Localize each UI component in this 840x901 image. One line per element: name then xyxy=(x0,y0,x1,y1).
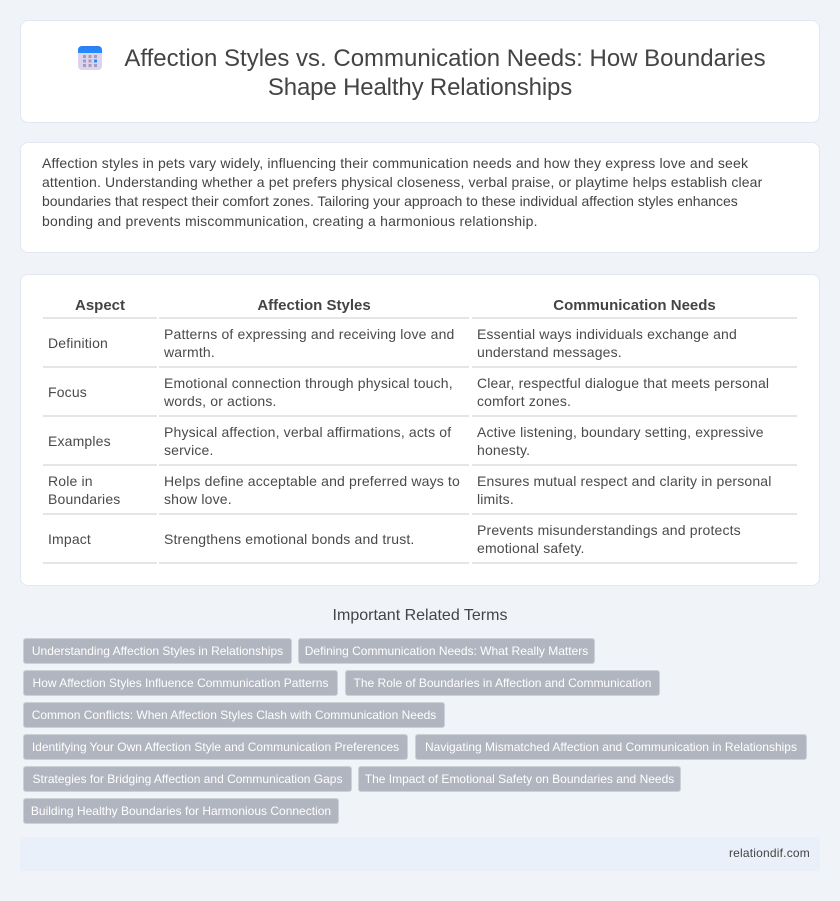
tag: The Role of Boundaries in Affection and Communication xyxy=(354,676,651,690)
panel: header xyxy=(20,20,820,123)
tag xyxy=(298,638,595,664)
tag: Common Conflicts: When Affection Styles Clash with Communication Needs xyxy=(32,708,436,722)
table: comfort zones. xyxy=(477,393,571,409)
footer xyxy=(20,837,820,871)
table: show love. xyxy=(164,491,232,507)
related terms tags xyxy=(23,638,807,824)
table: Essential ways individuals exchange and xyxy=(477,326,737,342)
tag: Defining Communication Needs: What Really Matters xyxy=(305,644,588,658)
related terms heading: Important Related Terms xyxy=(333,607,507,624)
table: honesty. xyxy=(477,442,530,458)
tag xyxy=(23,734,408,760)
table: Helps define acceptable and preferred ways to xyxy=(164,473,460,489)
title: Affection Styles vs. Communication Needs: How Boundaries xyxy=(124,45,766,72)
table: Strengthens emotional bonds and trust. xyxy=(164,531,414,547)
row: impact: Impact xyxy=(48,531,91,547)
tag xyxy=(358,766,681,792)
row: examples: Examples xyxy=(48,433,111,449)
tag xyxy=(23,638,292,664)
tag xyxy=(345,670,660,696)
table: warmth. xyxy=(164,344,215,360)
tag: Navigating Mismatched Affection and Communication in Relationships xyxy=(425,740,797,754)
header: aspect: Aspect xyxy=(75,297,125,314)
table: emotional safety. xyxy=(477,540,585,556)
tag: Strategies for Bridging Affection and Communication Gaps xyxy=(33,772,342,786)
tag: Building Healthy Boundaries for Harmonious Connection xyxy=(31,804,331,818)
intro text: Affection styles in pets vary widely, influencing their communication needs and how they express love and seek xyxy=(42,155,748,171)
table: words, or actions. xyxy=(164,393,277,409)
table: Patterns of expressing and receiving love and xyxy=(164,326,454,342)
header: communication needs: Communication Needs xyxy=(553,297,716,314)
table: Physical affection, verbal affirmations, acts of xyxy=(164,424,451,440)
footer source text: relationdif.com xyxy=(729,846,810,860)
table: understand messages. xyxy=(477,344,622,360)
intro text: boundaries that respect their comfort zones. Tailoring your approach to these individual affection styles enhances xyxy=(42,193,738,209)
table: service. xyxy=(164,442,214,458)
panel: intro paragraph xyxy=(20,142,820,253)
table xyxy=(43,297,797,564)
tag xyxy=(23,702,445,728)
table: Emotional connection through physical touch, xyxy=(164,375,453,391)
tag xyxy=(415,734,807,760)
row: focus: Focus xyxy=(48,384,87,400)
tag xyxy=(23,798,339,824)
header: affection styles: Affection Styles xyxy=(257,297,371,314)
tag: Understanding Affection Styles in Relationships xyxy=(32,644,283,658)
intro text: attention. Understanding whether a pet prefers physical closeness, verbal praise, or playtime helps establish clear xyxy=(42,174,762,190)
table: limits. xyxy=(477,491,514,507)
table: Prevents misunderstandings and protects xyxy=(477,522,741,538)
row: definition: Definition xyxy=(48,335,108,351)
tag xyxy=(23,670,338,696)
intro text xyxy=(42,155,762,229)
tag xyxy=(23,766,352,792)
title xyxy=(124,45,766,101)
row: role in boundaries: Boundaries xyxy=(48,491,120,507)
table: Clear, respectful dialogue that meets personal xyxy=(477,375,769,391)
table: Active listening, boundary setting, expressive xyxy=(477,424,764,440)
table: Ensures mutual respect and clarity in personal xyxy=(477,473,772,489)
tag: The Impact of Emotional Safety on Boundaries and Needs xyxy=(365,772,674,786)
row: role in boundaries: Role in xyxy=(48,473,93,489)
panel: comparison table xyxy=(20,274,820,586)
row: role in boundaries xyxy=(48,473,120,507)
intro text: bonding and prevents miscommunication, creating a harmonious relationship. xyxy=(42,213,538,229)
icon: calendar xyxy=(78,46,102,70)
title: Shape Healthy Relationships xyxy=(268,74,572,101)
tag: Identifying Your Own Affection Style and Communication Preferences xyxy=(32,740,399,754)
tag: How Affection Styles Influence Communication Patterns xyxy=(33,676,328,690)
